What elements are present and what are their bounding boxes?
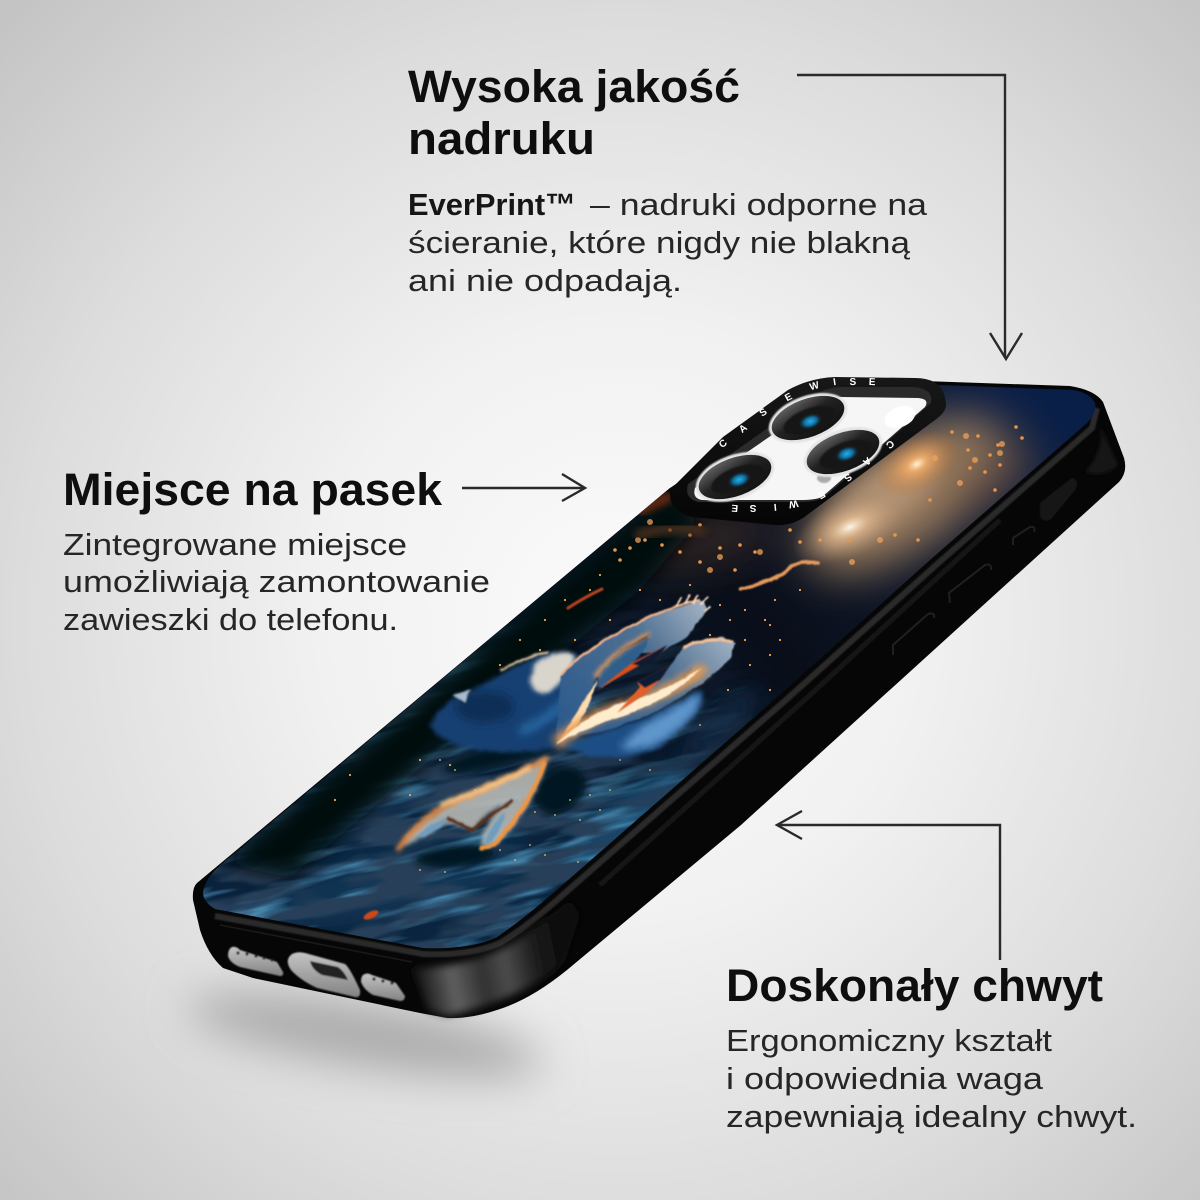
arrow: strap slot <box>462 474 585 501</box>
window shade <box>817 473 831 483</box>
body text: Ergonomiczny kształt <box>726 1023 1052 1058</box>
flash <box>881 402 919 432</box>
ember in water <box>362 909 380 921</box>
phone shadow <box>182 975 548 1095</box>
body text: EverPrint™ <box>408 187 576 222</box>
dark water patches <box>411 746 590 873</box>
brand ring lower: C <box>883 437 896 450</box>
brand ring lower: E <box>815 488 827 501</box>
speaker left <box>228 947 283 976</box>
lens right <box>797 417 889 487</box>
camera bumper <box>670 377 946 525</box>
arrow: grip <box>777 811 1000 960</box>
brand ring lower: W <box>787 497 799 510</box>
light flares <box>796 434 953 562</box>
upper corner shading <box>1085 425 1118 474</box>
brand ring upper: S <box>849 377 857 388</box>
brand ring upper: W <box>808 380 821 393</box>
brand ring lower: S <box>749 502 756 513</box>
body text: – nadruki odporne na <box>590 187 928 222</box>
dark left band <box>223 488 700 878</box>
brand ring lower <box>731 437 896 513</box>
phone case <box>193 378 1125 1018</box>
side button: action <box>1040 478 1077 521</box>
side groove <box>600 520 1000 885</box>
callout: print quality <box>408 61 928 298</box>
brand ring lower: I <box>773 501 777 512</box>
heading <box>408 61 740 164</box>
brand ring lower: S <box>841 471 854 483</box>
bumper inner bevel <box>687 387 931 502</box>
heading: Doskonały chwyt <box>726 960 1103 1011</box>
body text <box>726 1023 1137 1134</box>
callout: strap slot <box>63 464 490 637</box>
swan beaks <box>597 645 670 713</box>
brand ring upper: E <box>869 377 876 388</box>
arrow: print quality <box>797 75 1022 359</box>
brand ring upper: S <box>758 406 770 419</box>
side rim highlight <box>215 408 1097 954</box>
sky haze <box>622 386 1047 604</box>
camera island <box>670 377 946 525</box>
body text <box>408 187 928 298</box>
heading: Miejsce na pasek <box>63 464 443 515</box>
bottom seam <box>220 925 412 962</box>
body text <box>63 527 490 637</box>
brand ring upper: I <box>833 377 837 388</box>
body text: ścieranie, które nigdy nie blakną <box>408 225 911 260</box>
heading: Wysoka jakość <box>408 61 740 112</box>
floating embers <box>335 427 1022 872</box>
case body <box>193 378 1125 1018</box>
body text: zapewniają idealny chwyt. <box>726 1099 1137 1134</box>
swan reflection <box>398 758 548 850</box>
side buttons <box>893 527 1034 655</box>
swan bodies <box>430 652 702 757</box>
brand ring lower: A <box>860 454 873 467</box>
brand ring lower: E <box>731 502 739 513</box>
lower corner highlight <box>412 900 580 1016</box>
case print: swans artwork <box>203 385 1096 948</box>
body text: ani nie odpadają. <box>408 263 682 298</box>
lens left <box>689 442 781 512</box>
body text: umożliwiają zamontowanie <box>63 564 490 599</box>
body text: i odpowiednia waga <box>726 1061 1044 1096</box>
brand ring upper: C <box>717 438 730 451</box>
brand ring upper: A <box>737 422 750 436</box>
speaker right <box>361 974 405 1001</box>
water ripples <box>203 612 751 948</box>
water tone <box>272 686 762 930</box>
lens top <box>762 383 854 453</box>
camera window <box>694 397 926 500</box>
brand ring upper: E <box>783 391 795 404</box>
swan necks <box>556 594 735 745</box>
body text: zawieszki do telefonu. <box>63 602 398 637</box>
charging port <box>288 952 360 997</box>
brand ring upper <box>717 377 876 451</box>
heading: nadruku <box>408 113 595 164</box>
ember smears <box>568 497 818 608</box>
body text: Zintegrowane miejsce <box>63 527 407 562</box>
callout: grip <box>726 960 1137 1134</box>
warm haze core <box>816 445 934 545</box>
